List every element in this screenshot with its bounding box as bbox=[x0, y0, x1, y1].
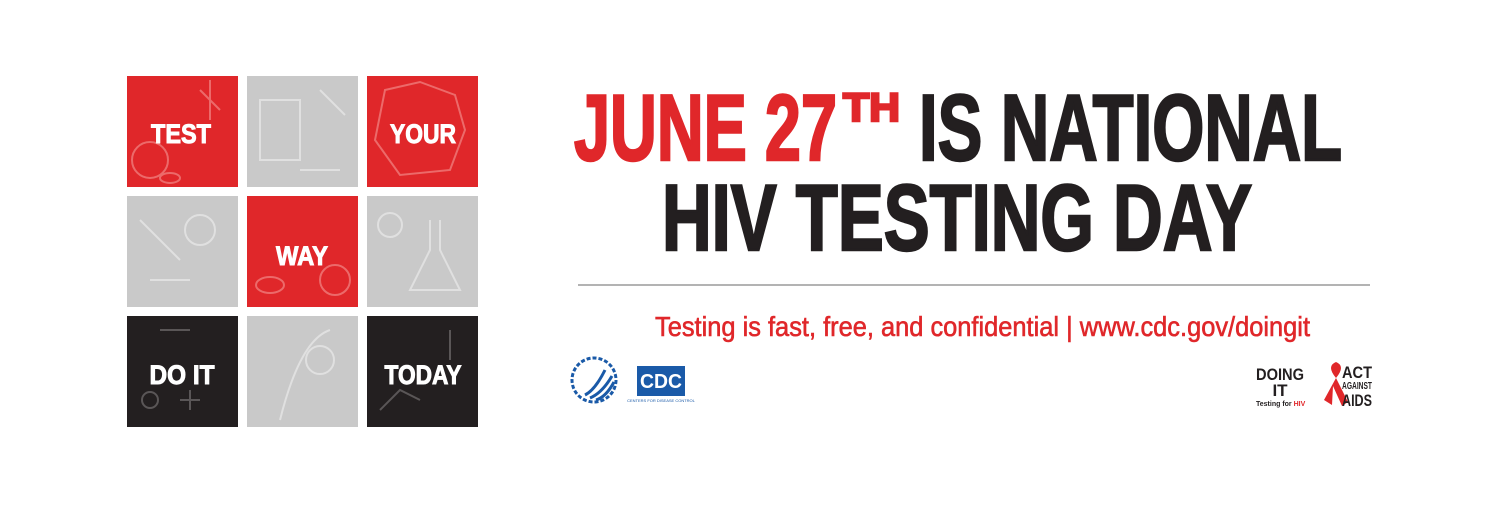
logo: Act Against AIDS bbox=[1324, 362, 1373, 410]
tile: DO IT: DO IT bbox=[150, 360, 215, 390]
logo: HHS bbox=[572, 358, 616, 402]
headline: JUNE 27 bbox=[574, 75, 837, 180]
tile: grey 1 bbox=[247, 76, 358, 187]
tile: YOUR bbox=[367, 76, 478, 187]
logo: Doing It: Testing for HIV bbox=[1256, 401, 1306, 408]
tile: TEST: TEST bbox=[151, 119, 211, 149]
logo: CDC: CDC bbox=[640, 371, 682, 393]
tile grid bbox=[127, 76, 478, 427]
tile: DO IT bbox=[127, 316, 238, 427]
headline: HIV TESTING DAY bbox=[662, 165, 1252, 270]
logo: Act Against AIDS: AGAINST bbox=[1342, 381, 1372, 392]
tile: TEST bbox=[127, 76, 238, 187]
logo: Doing It bbox=[1256, 365, 1306, 408]
tile: grey 3 bbox=[367, 196, 478, 307]
logo: CDC: CENTERS FOR DISEASE CONTROL bbox=[627, 398, 696, 403]
headline bbox=[574, 75, 1342, 270]
tile: WAY bbox=[247, 196, 358, 307]
tile: TODAY: TODAY bbox=[384, 360, 462, 390]
logo: Doing It: IT bbox=[1272, 381, 1288, 400]
subtitle: Testing is fast, free, and confidential | www.cdc.gov/doingit bbox=[655, 311, 1310, 342]
headline: TH bbox=[843, 86, 900, 130]
logo: Act Against AIDS: ACT bbox=[1342, 363, 1373, 382]
logo: Doing It: DOING bbox=[1256, 365, 1304, 384]
tile: TODAY bbox=[367, 316, 478, 427]
tile: YOUR: YOUR bbox=[390, 119, 456, 149]
headline: IS NATIONAL bbox=[919, 75, 1342, 180]
tile: grey 4 bbox=[247, 316, 358, 427]
tile: grey 2 bbox=[127, 196, 238, 307]
logo: Act Against AIDS: AIDS bbox=[1342, 391, 1372, 410]
logo: CDC bbox=[627, 366, 696, 403]
tile: WAY: WAY bbox=[276, 241, 328, 271]
